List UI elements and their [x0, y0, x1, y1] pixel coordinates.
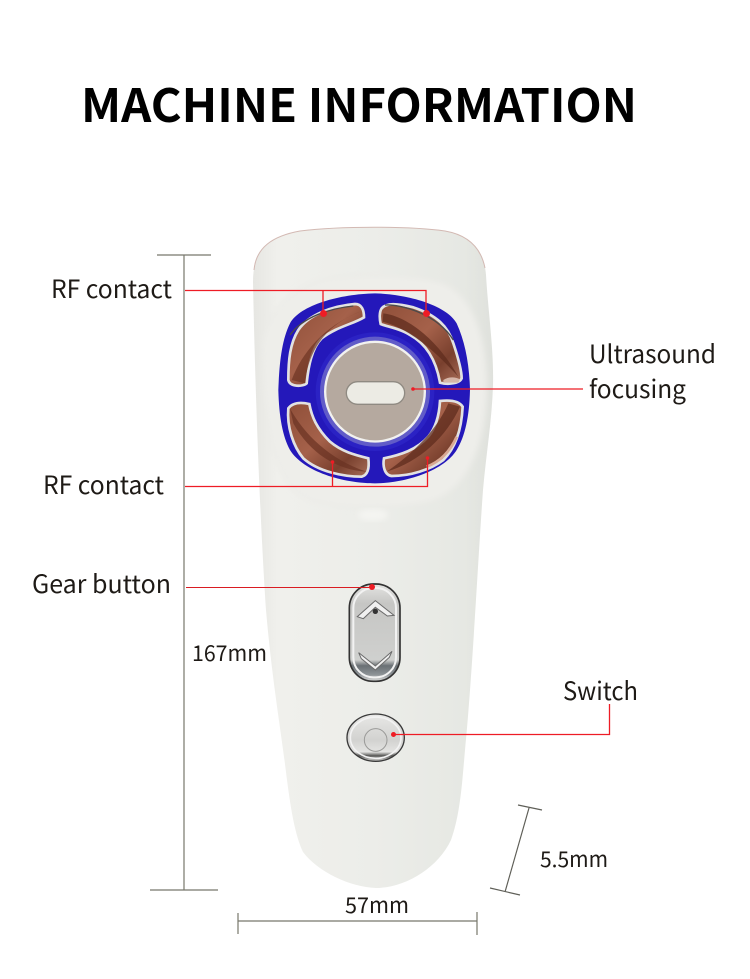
callout: RF contact top: RF contact	[51, 270, 173, 306]
callout: ultrasound focusing: focusing	[589, 370, 686, 406]
centre slot	[346, 382, 405, 404]
label: 167mm: 167mm	[192, 636, 267, 668]
gear button	[349, 584, 400, 681]
dimension: thickness 5.5mm	[490, 805, 542, 895]
title: MACHINE INFORMATION	[81, 70, 637, 136]
small mark below head	[358, 509, 388, 521]
dimension: width 57mm	[238, 912, 477, 935]
callout: RF contact bottom: RF contact	[43, 466, 165, 502]
callout: RF contact top	[51, 270, 430, 317]
RF pad: lower right	[384, 401, 463, 476]
callout: ultrasound focusing	[411, 335, 716, 406]
callout: gear button: Gear button	[32, 565, 171, 601]
label: 57mm: 57mm	[345, 888, 409, 920]
RF pad: lower left	[288, 403, 369, 477]
device body	[253, 227, 493, 888]
centre metal disc	[316, 332, 434, 451]
RF pad: upper right	[380, 304, 462, 384]
callout: ultrasound focusing: Ultrasound	[589, 335, 716, 371]
callout: switch	[391, 672, 638, 737]
head recess	[262, 275, 487, 508]
callout: RF contact bottom	[43, 456, 429, 502]
RF pad: upper left	[288, 304, 364, 386]
switch button	[347, 714, 404, 761]
callout: gear button	[32, 565, 375, 601]
dimension: height 167mm	[150, 255, 218, 890]
label: 5.5mm: 5.5mm	[540, 842, 608, 874]
callout: switch: Switch	[563, 672, 638, 708]
down arrow	[359, 651, 392, 670]
ultrasound and RF head	[278, 293, 470, 483]
power icon	[364, 729, 387, 751]
blue ring	[278, 293, 470, 483]
up arrow	[357, 601, 394, 619]
